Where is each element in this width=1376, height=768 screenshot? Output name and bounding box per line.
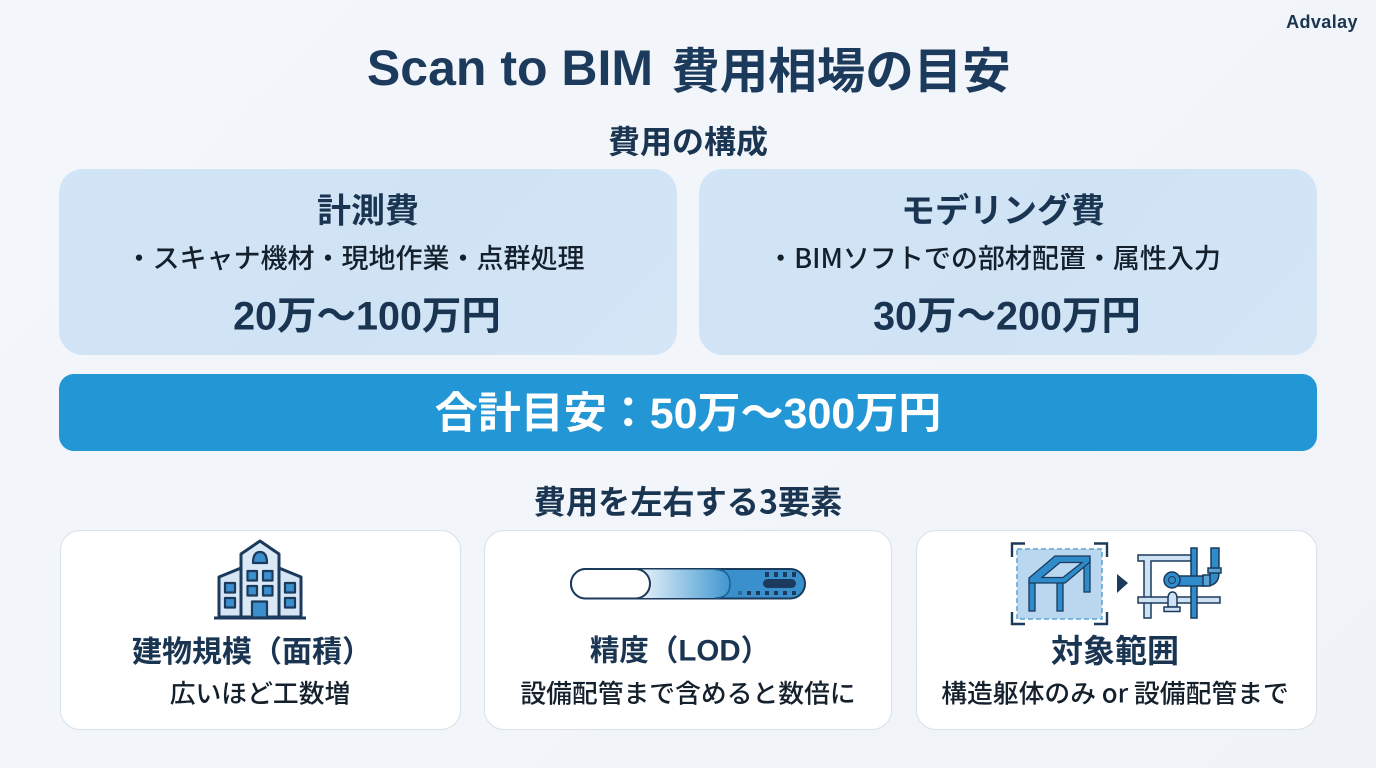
- heading: cost structure: 費用の構成: [608, 117, 768, 163]
- total text: 合計目安：50万〜300万円: [435, 390, 941, 438]
- panel: accuracy: [484, 530, 892, 730]
- price: measurement cost: 20万〜100万円: [233, 294, 501, 338]
- panel heading: modeling cost: モデリング費: [901, 184, 1105, 233]
- icon: scope structure to piping: [1010, 542, 1222, 626]
- card title: accuracy: 精度（LOD）: [590, 634, 770, 667]
- total bar: [59, 374, 1317, 451]
- title: Scan to BIM: [367, 40, 653, 96]
- title: 費用相場の目安: [671, 32, 1011, 102]
- logo: Advalay: Advalay: [1286, 12, 1358, 32]
- card title: building scale: 建物規模（面積）: [132, 627, 372, 671]
- text: measurement cost items: ・スキャナ機材・現地作業・点群処理: [126, 237, 584, 276]
- text: modeling cost items: ・BIMソフトでの部材配置・属性入力: [767, 237, 1221, 276]
- panel: target scope: [916, 530, 1317, 730]
- heading: three factors: 費用を左右する3要素: [534, 478, 842, 524]
- price: modeling cost: 30万〜200万円: [873, 294, 1141, 338]
- panel: building scale: [60, 530, 461, 730]
- card title: target scope: 対象範囲: [1051, 626, 1179, 672]
- icon: building: [214, 540, 306, 620]
- title: [367, 32, 1011, 102]
- card text: building scale: 広いほど工数増: [170, 674, 350, 711]
- icon: LOD slider: [570, 568, 806, 600]
- panel: modeling cost: [699, 169, 1317, 355]
- panel: measurement cost: [59, 169, 677, 355]
- card text: accuracy: 設備配管まで含めると数倍に: [520, 674, 856, 711]
- panel heading: measurement cost: 計測費: [317, 184, 419, 233]
- card text: target scope: 構造躯体のみ or 設備配管まで: [941, 674, 1289, 711]
